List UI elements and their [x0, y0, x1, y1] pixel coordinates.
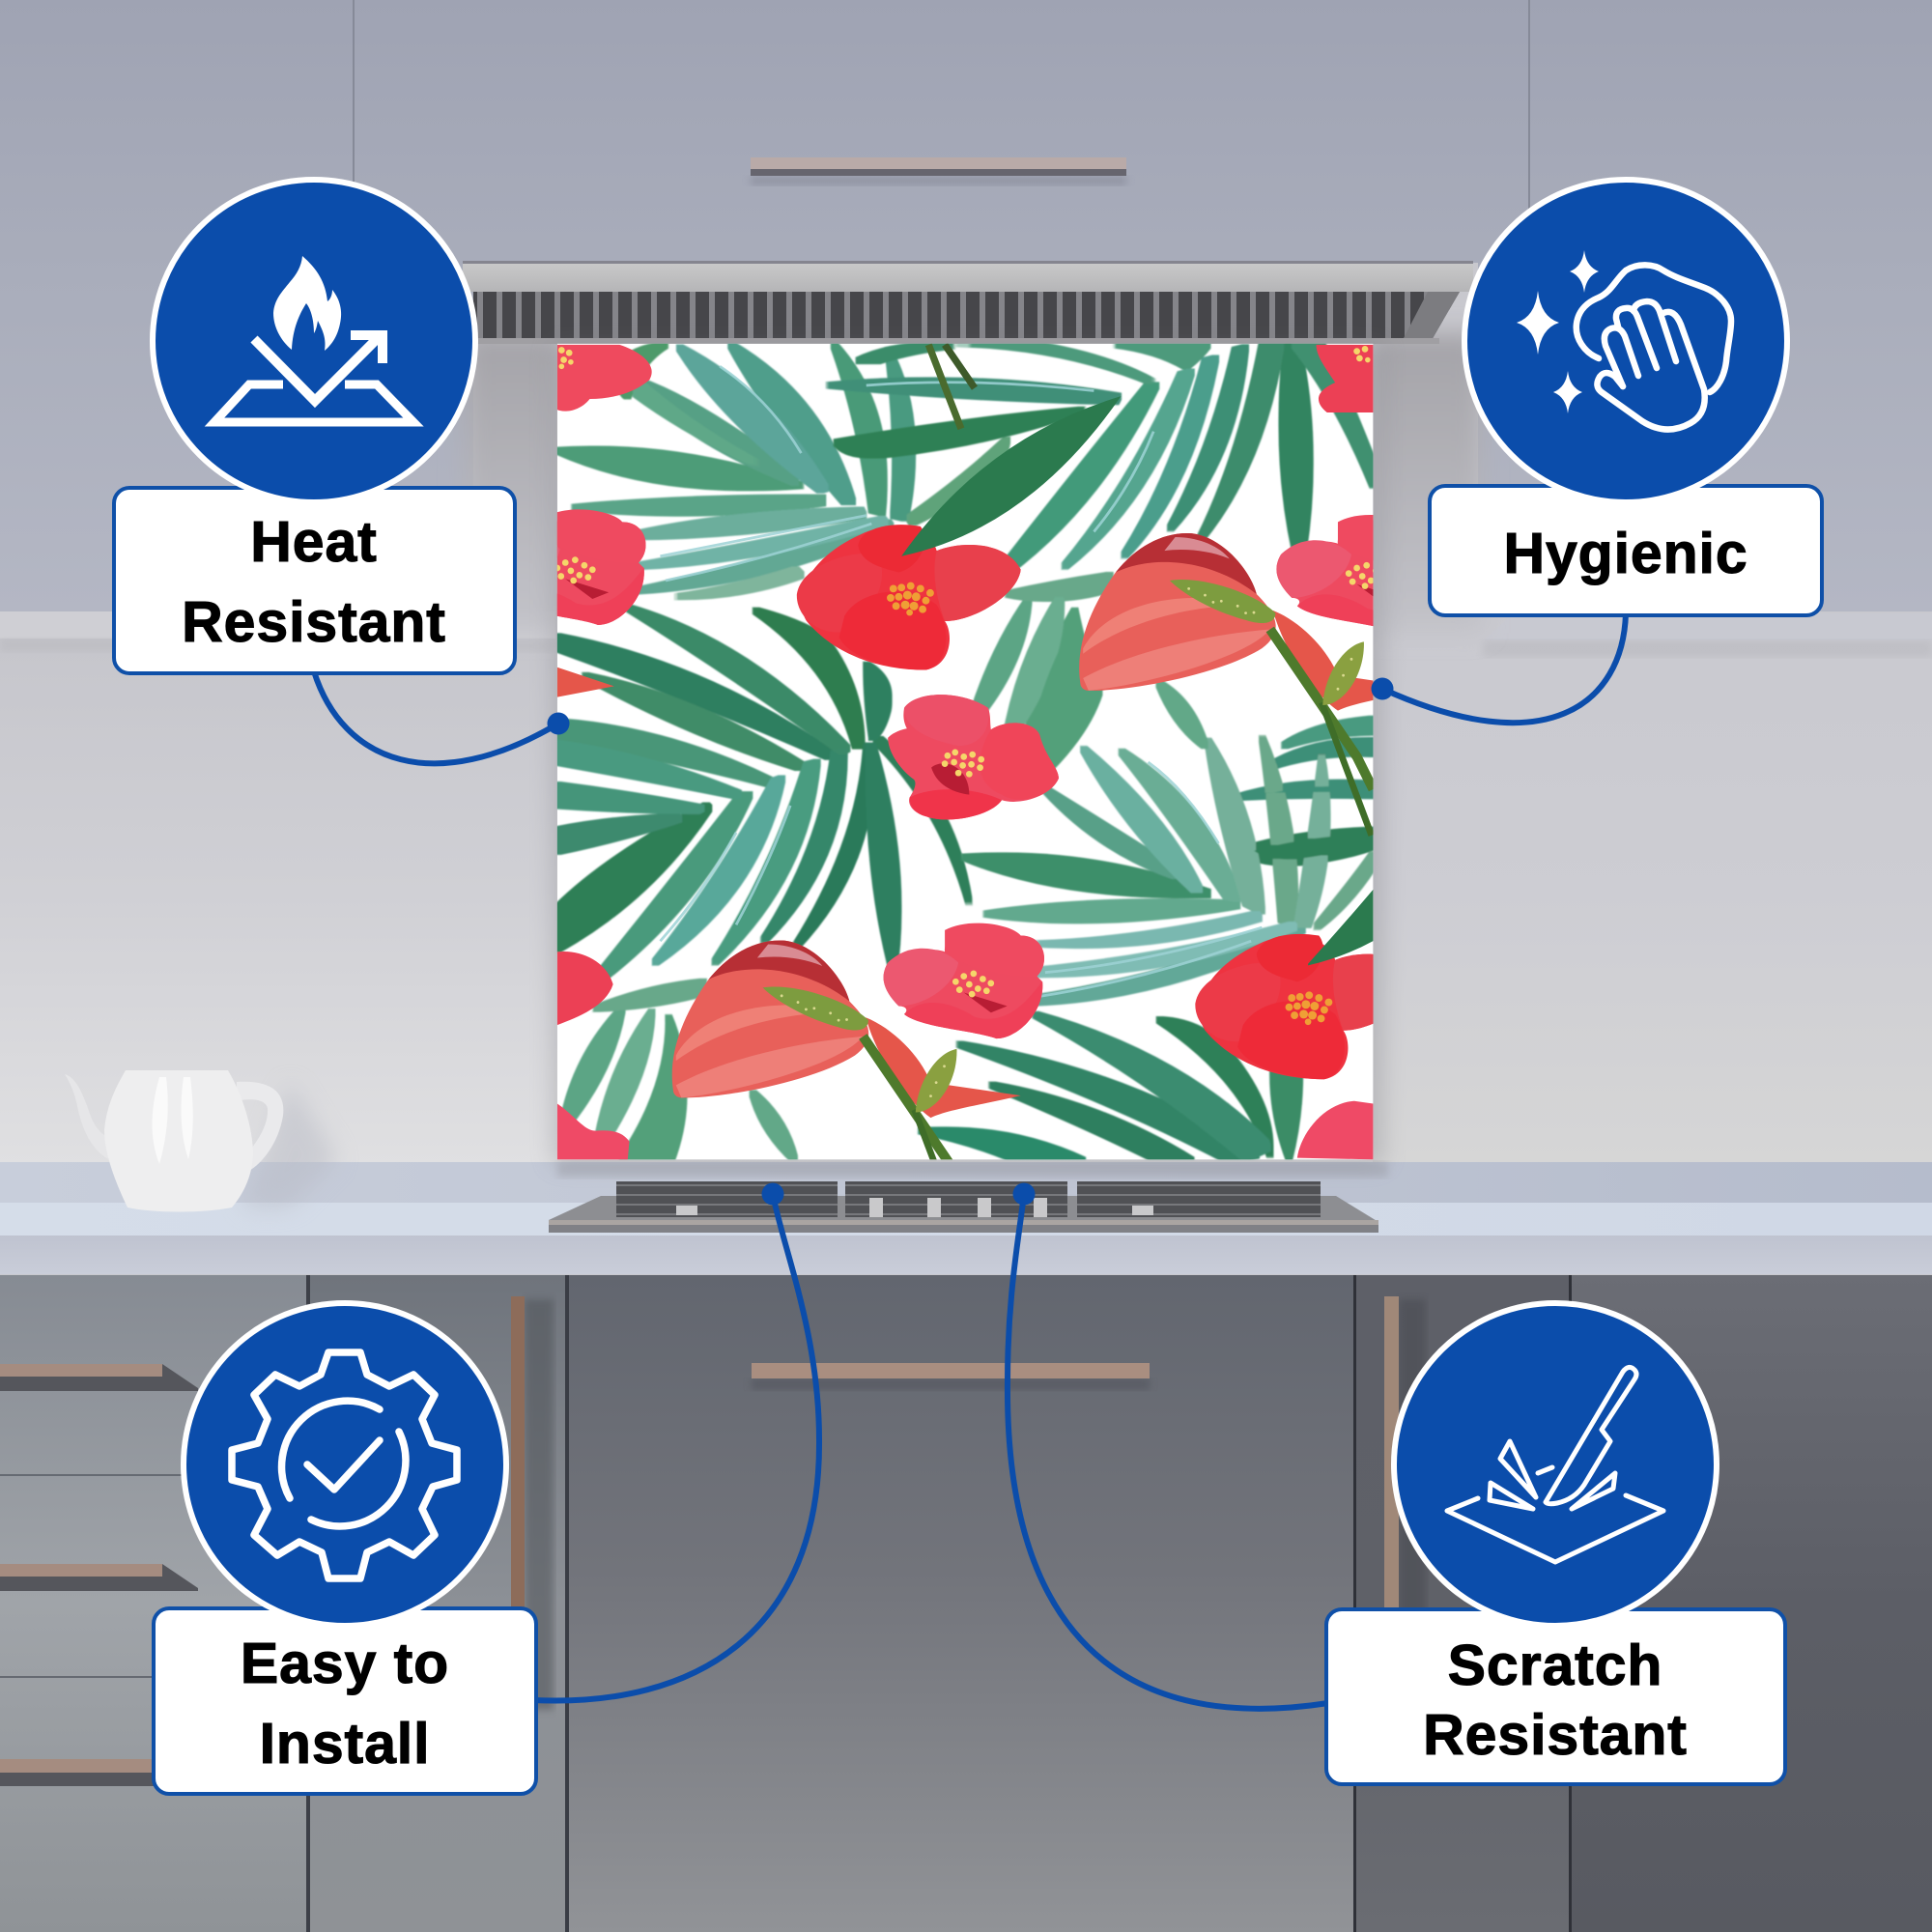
label box — [1430, 486, 1822, 615]
icon: hand wiping with sparkles — [1517, 250, 1731, 430]
feature: heat resistant — [114, 180, 515, 673]
upper cabinets — [0, 0, 1932, 633]
feature: easy to install — [154, 1303, 536, 1794]
flower: centre pink — [888, 695, 1059, 819]
dark overlapping leaves — [901, 396, 1373, 965]
label text line 2: Install — [260, 1712, 430, 1776]
connector: scratch resistant — [1008, 1182, 1328, 1709]
label text: Heat — [250, 510, 378, 574]
anthurium: lower left — [672, 941, 1020, 1159]
light leaf streaks — [660, 366, 1262, 996]
icon badge — [1464, 180, 1787, 502]
extractor hood — [463, 261, 1473, 344]
icon badge — [184, 1303, 506, 1626]
connector: easy to install — [533, 1182, 819, 1701]
flower: lower pink — [884, 923, 1044, 1038]
flower: right edge pink — [1276, 515, 1374, 626]
stems — [928, 345, 975, 429]
label text: Scratch — [1448, 1634, 1662, 1697]
label box — [114, 488, 515, 673]
label text: Easy to — [241, 1632, 449, 1695]
flower: centre red — [797, 525, 1021, 670]
flower: left edge pink — [556, 509, 646, 625]
drawer handles — [0, 1296, 1426, 1786]
frond: upper left — [557, 345, 1008, 597]
frond: bottom left — [561, 981, 795, 1159]
flower: right red — [1195, 933, 1374, 1080]
frond: top right — [828, 344, 1373, 583]
icon: gear with check — [232, 1352, 457, 1578]
label text: Hygienic — [1503, 522, 1748, 585]
anthurium: upper right — [1079, 533, 1374, 837]
frond: centre — [969, 575, 1205, 789]
cabinet handle — [751, 157, 1126, 185]
feature: hygienic — [1430, 180, 1822, 615]
connector: hygienic — [1372, 613, 1626, 723]
label box — [1326, 1609, 1785, 1784]
icon: knife scratching surface — [1447, 1367, 1663, 1562]
frond: lower right — [964, 719, 1373, 1004]
connector: heat resistant — [314, 671, 570, 763]
panel shadow — [553, 344, 1383, 1165]
feature: scratch resistant — [1326, 1303, 1785, 1784]
flowers: corner fragments — [557, 345, 1373, 1159]
countertop — [0, 1162, 1932, 1274]
label text line 2: Resistant — [182, 590, 446, 654]
teapot — [65, 1070, 338, 1211]
frond: centre left — [557, 608, 969, 990]
icon badge — [1394, 1303, 1717, 1626]
wall — [0, 611, 1932, 1169]
icon: flame over surface — [214, 256, 413, 422]
panel: tropical splashback — [556, 344, 1374, 1159]
label box — [154, 1608, 536, 1794]
frond: bottom — [921, 1014, 1300, 1160]
lower cabinets — [0, 1275, 1932, 1932]
gas hob — [549, 1181, 1378, 1233]
icon badge — [153, 180, 475, 502]
label text line 2: Resistant — [1423, 1703, 1688, 1767]
